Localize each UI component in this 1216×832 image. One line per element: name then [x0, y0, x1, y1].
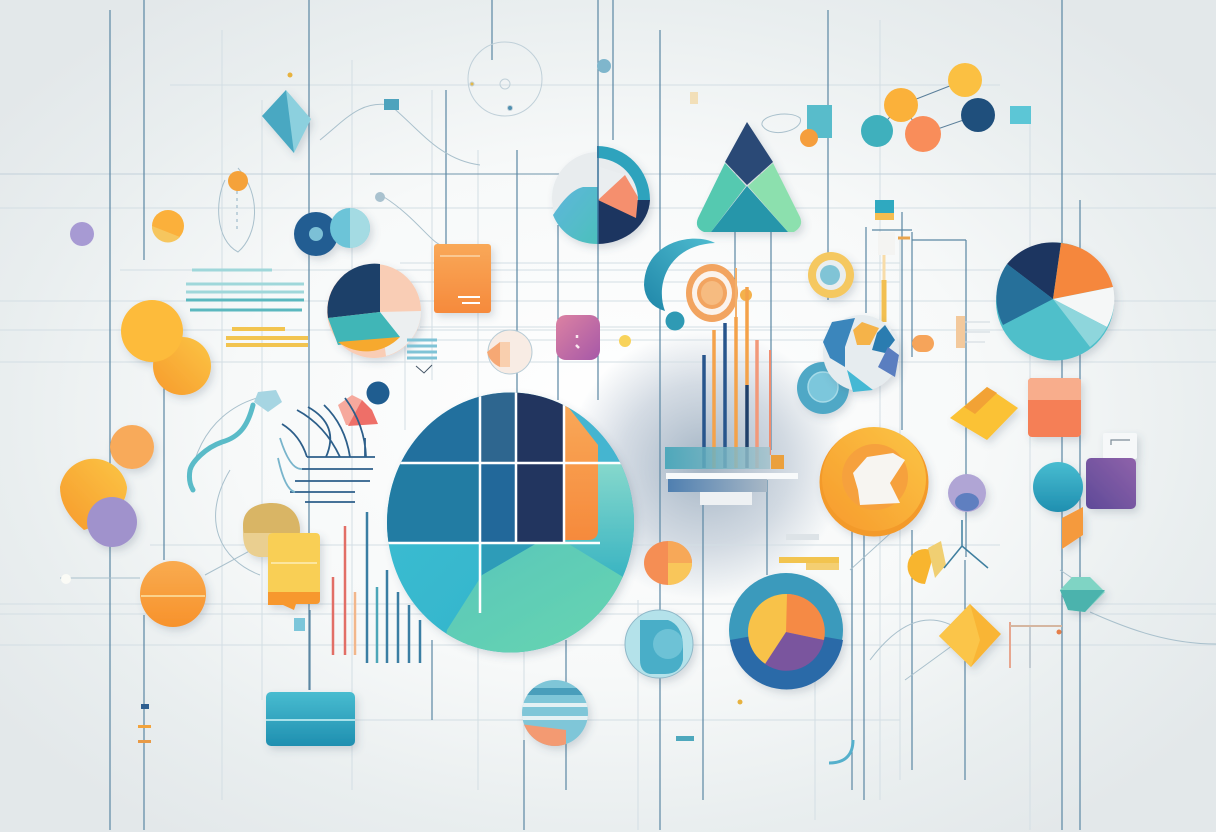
icon: target with arc — [644, 239, 752, 330]
pie chart: right — [996, 242, 1114, 360]
bar chart: center — [704, 268, 770, 468]
icon: teal rounded box — [266, 692, 355, 746]
text lines: yellow list — [226, 329, 308, 345]
central soft shadow — [565, 330, 845, 600]
icon: small bars — [779, 534, 839, 570]
icon: small markers bottom — [138, 700, 853, 763]
pie chart: left — [327, 264, 421, 358]
icon: yellow sticky notes — [243, 503, 320, 610]
card: coral square — [1028, 378, 1081, 437]
icon: top-right connected balls — [800, 63, 1031, 152]
bar chart: lower left — [333, 512, 420, 663]
icon: large orange badge — [820, 427, 928, 536]
icon: small cards row — [407, 315, 600, 374]
icon: geometric triangle — [697, 122, 801, 232]
icon: small tag — [294, 618, 305, 631]
icon: yellow tilted card — [950, 387, 1018, 440]
icon: big grid circle — [387, 392, 639, 659]
icon: navy dot and red gem — [338, 382, 390, 426]
platform — [665, 447, 798, 505]
icon: teal ball and purple box — [1033, 433, 1137, 549]
icon: teal glass orb — [625, 610, 693, 678]
icon: orange teal ball — [644, 541, 692, 585]
icon: peach pill — [912, 316, 990, 352]
icon: blue circle ring — [797, 362, 849, 414]
pie chart: top center — [552, 146, 650, 244]
card: orange note — [434, 244, 491, 313]
icon: teal diamond — [262, 90, 311, 153]
icon: yellow split ball — [908, 520, 988, 584]
small bars right — [1010, 622, 1062, 668]
icon: overlapping yellow circles — [121, 300, 211, 395]
icon: right tower — [875, 200, 910, 322]
icon: teal swoosh — [189, 390, 282, 490]
icon: small ring badge — [808, 252, 854, 298]
icon: segmented ring — [823, 315, 899, 392]
icon: orange half ball — [152, 210, 184, 242]
donut chart — [729, 573, 843, 689]
icon: navy and teal discs — [294, 208, 370, 256]
text lines: teal list — [186, 270, 304, 310]
icon: yellow diamond — [939, 604, 1001, 667]
icon: top outline circle — [468, 42, 542, 116]
icon: orange pin — [228, 171, 248, 232]
icon: left big orange cluster — [60, 425, 154, 547]
icon: purple dot — [70, 222, 94, 246]
icon: teal gem — [1060, 577, 1105, 612]
icon: orange ball with line — [140, 561, 206, 627]
icon: small dots and top connectors — [61, 59, 698, 584]
icon: purple small sphere — [948, 474, 986, 512]
icon: fan wave lines — [278, 398, 375, 502]
icon: striped orb — [520, 678, 590, 750]
